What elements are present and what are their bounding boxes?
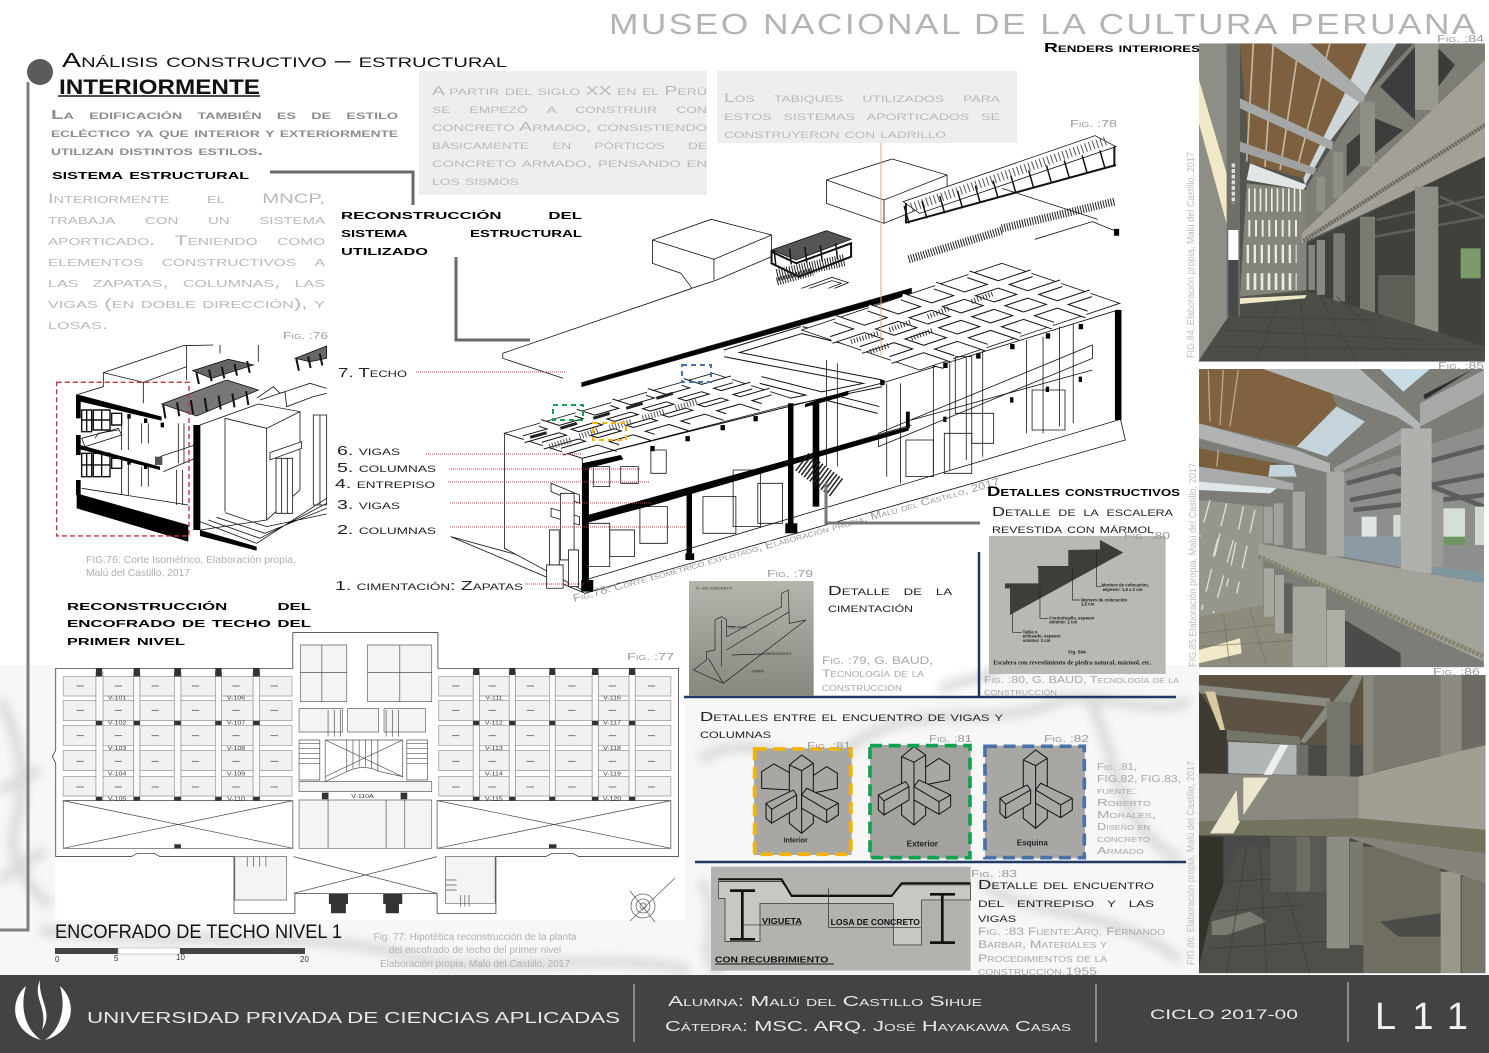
construction layer labels: 2. columnas bbox=[337, 522, 436, 537]
scale bar: 5 bbox=[114, 954, 119, 963]
heading reconstruccion sistema bbox=[341, 206, 582, 258]
section face bbox=[582, 310, 1118, 580]
beam labels: V-110A bbox=[351, 794, 375, 800]
beam labels: V-111 bbox=[485, 695, 503, 701]
right wing panels bbox=[439, 677, 671, 796]
subheading interiormente: INTERIORMENTE bbox=[59, 76, 260, 99]
beam interiors bbox=[96, 673, 635, 800]
callout: concreto armado bbox=[419, 71, 707, 195]
stair annotations: 1,5 cm bbox=[1081, 601, 1095, 606]
steps bbox=[200, 498, 327, 543]
interior columns and floors bbox=[582, 323, 1092, 483]
beam labels: V-118 bbox=[603, 746, 621, 752]
callout: tabiques: Los tabiques utilizados para bbox=[724, 91, 1000, 105]
caption fig 76: Malú del Castillo, 2017 bbox=[86, 568, 190, 579]
callout: concreto armado: concreto armado, pensando en bbox=[432, 156, 707, 170]
caption fig 79: Fig. :79, G. BAUD, bbox=[822, 655, 933, 667]
scale bar: 10 bbox=[176, 953, 185, 962]
construction layer labels: 3. vigas bbox=[337, 497, 400, 512]
caption joints source: concreto bbox=[1097, 834, 1151, 845]
stair annotations: Escalera con revestimiento de piedra natural, mármol, etc. bbox=[993, 659, 1152, 666]
callout: concreto armado: los sismos bbox=[432, 174, 519, 188]
north symbol bbox=[630, 878, 675, 922]
exploded box left bbox=[653, 219, 772, 288]
scale bar: 20 bbox=[300, 955, 309, 964]
marble texture background bbox=[0, 665, 1200, 975]
red dashed zone bbox=[57, 382, 189, 536]
callout: concreto armado: A partir del siglo XX en el Perú bbox=[432, 84, 707, 98]
photo fig 83 entrepiso detail: CON RECUBRIMIENTO bbox=[715, 955, 828, 964]
caption joints source: Roberto bbox=[1097, 798, 1152, 809]
caption joints source: fuente: bbox=[1097, 786, 1136, 797]
university name: UNIVERSIDAD PRIVADA DE CIENCIAS APLICADAS bbox=[87, 1010, 620, 1027]
photo fig 83 entrepiso detail: VIGUETA bbox=[762, 916, 803, 926]
photo fig 79 foundation detail: ZAPATA bbox=[752, 670, 765, 674]
construction layer labels: 7. Techo bbox=[338, 365, 407, 380]
beam labels: V-105 bbox=[108, 796, 127, 802]
callout: tabiques bbox=[717, 71, 1017, 143]
heading detalle escalera: revestida con mármol bbox=[992, 521, 1154, 536]
intro paragraph: utilizan distintos estilos. bbox=[51, 143, 263, 158]
heading detalle entrepiso bbox=[978, 877, 1154, 925]
central roof beams bbox=[725, 330, 944, 410]
heading detalle escalera: Detalle de la escalera bbox=[992, 504, 1173, 519]
beam labels: V-110 bbox=[227, 796, 245, 802]
beam labels: V-116 bbox=[603, 695, 621, 701]
callout: concreto armado: se empezó a construir con bbox=[432, 102, 707, 116]
highlight box: interior bbox=[593, 423, 626, 440]
beam labels: V-104 bbox=[108, 771, 127, 777]
slab techo bbox=[503, 288, 911, 387]
main block bbox=[200, 404, 302, 530]
render fig 86 bbox=[1199, 675, 1486, 973]
central block bbox=[235, 645, 495, 903]
slats bbox=[909, 188, 1119, 259]
photo joint interior: Interior bbox=[784, 838, 808, 845]
second floor band bbox=[879, 345, 1092, 447]
heading reconstruccion sistema: utilizado bbox=[341, 242, 428, 258]
beam labels: V-115 bbox=[485, 796, 503, 802]
small canopy bbox=[772, 231, 851, 302]
construction layer labels: 5. columnas bbox=[337, 460, 436, 475]
heading detalle entrepiso: del entrepiso y las bbox=[978, 895, 1154, 910]
beam labels: V-101 bbox=[108, 695, 127, 701]
heading reconstruccion encofrado: encofrado de techo del bbox=[67, 614, 311, 630]
caption fig 77: Fig. 77: Hipotética reconstrucción de la planta bbox=[374, 932, 577, 943]
canopies bbox=[162, 346, 327, 416]
caption joints source: Diseño en bbox=[1097, 822, 1150, 833]
figure label 82: Fig. :82 bbox=[1044, 734, 1090, 745]
highlight box: esquina bbox=[682, 365, 711, 382]
open void crosses bbox=[63, 801, 671, 893]
title: MUSEO NACIONAL DE LA CULTURA PERUANA bbox=[609, 9, 1478, 41]
stair annotations: mínimo: 3 cm bbox=[1023, 638, 1051, 643]
beam labels: V-119 bbox=[603, 771, 621, 777]
sheet number: L11 bbox=[1375, 996, 1468, 1038]
vertical caption fig 86: FIG.86: Elaboración propia, Malú del Castillo, 2017 bbox=[1186, 761, 1197, 965]
stair annotations: espesor: 1,5 a 2 cm bbox=[1103, 587, 1143, 592]
figure label 77: Fig. :77 bbox=[627, 652, 675, 663]
construction layer labels: 1. cimentación: Zapatas bbox=[335, 578, 523, 593]
ground plinth bbox=[451, 417, 1125, 593]
paragraph sistema aporticado: losas. bbox=[48, 316, 108, 332]
column squares bbox=[96, 668, 635, 913]
photo fig 79 foundation detail: SOBRECIMIENTO bbox=[763, 652, 792, 656]
plan title: ENCOFRADO DE TECHO NIVEL 1 bbox=[55, 922, 342, 943]
callout: concreto armado: básicamente en pórticos de bbox=[432, 138, 707, 152]
photo fig 80 stair detail bbox=[989, 536, 1166, 674]
floor plan encofrado bbox=[52, 633, 678, 913]
floors and columns bbox=[82, 417, 195, 505]
roof grid right wing bbox=[802, 263, 1120, 370]
caption fig 83: Procedimientos de la bbox=[978, 953, 1108, 965]
stair annotations: enlosado, espesor bbox=[1023, 634, 1061, 639]
connector detalles bbox=[826, 483, 980, 523]
beam labels: V-114 bbox=[485, 771, 503, 777]
photo fig 83 entrepiso detail bbox=[711, 867, 971, 971]
photo fig 79 foundation detail: ®—DE CONCRETO bbox=[696, 586, 732, 591]
figure label 76: Fig. :76 bbox=[283, 331, 329, 342]
photo fig 83 entrepiso detail: LOSA DE CONCRETO bbox=[831, 917, 920, 927]
beam labels: V-106 bbox=[227, 695, 246, 701]
window grids bbox=[82, 410, 122, 477]
beam labels: V-112 bbox=[485, 720, 503, 726]
render fig 85 bbox=[1199, 369, 1484, 668]
roof grid left wing bbox=[504, 373, 802, 458]
caption fig 79 bbox=[822, 655, 933, 694]
heading reconstruccion encofrado: primer nivel bbox=[67, 632, 185, 648]
intro paragraph: ecléctico ya que interior y exteriormente bbox=[51, 125, 398, 140]
callout: tabiques: construyeron con ladrillo bbox=[724, 127, 946, 141]
paragraph sistema aporticado: Interiormente el MNCP, bbox=[48, 190, 325, 206]
paragraph sistema aporticado bbox=[48, 190, 326, 332]
beam labels: V-102 bbox=[108, 720, 127, 726]
photo fig 79 foundation detail bbox=[689, 581, 814, 696]
highlight box: exterior bbox=[553, 405, 583, 420]
beam labels: V-103 bbox=[108, 746, 127, 752]
student: Alumna: Malú del Castillo Sihue bbox=[668, 994, 983, 1010]
paragraph sistema aporticado: elementos constructivos a bbox=[48, 253, 326, 269]
exploded isometric drawing bbox=[451, 136, 1125, 593]
stair annotations: Tabla o bbox=[1023, 630, 1038, 635]
upper volume bbox=[76, 345, 258, 403]
beam labels: V-109 bbox=[227, 771, 246, 777]
heading reconstruccion sistema: reconstrucción del bbox=[341, 206, 582, 222]
figure label 84: Fig. :84 bbox=[1437, 34, 1485, 45]
facade wall bbox=[504, 433, 582, 590]
figure label 79: Fig. :79 bbox=[767, 569, 814, 580]
heading detalle cimentacion bbox=[828, 583, 952, 615]
logo bbox=[15, 980, 71, 1040]
figure label 81 exterior: Fig. :81 bbox=[929, 734, 973, 745]
connector reconstruccion bbox=[456, 257, 530, 340]
long canopy bbox=[903, 136, 1116, 223]
beam labels: V-120 bbox=[603, 796, 622, 802]
blue divider lower bbox=[695, 861, 1186, 863]
slab tags bbox=[76, 686, 655, 787]
caption fig 80: Fig. :80, G. BAUD, Tecnología de la bbox=[984, 675, 1179, 686]
paragraph sistema aporticado: aporticado. Teniendo como bbox=[48, 232, 325, 248]
photo joint exterior bbox=[870, 745, 971, 858]
beam labels: V-107 bbox=[227, 720, 246, 726]
figure label 81 interior: Fig. :81 bbox=[807, 741, 852, 752]
heading reconstruccion encofrado: reconstrucción del bbox=[67, 597, 311, 613]
divider one bbox=[633, 984, 635, 1042]
heading detalles constructivos: Detalles constructivos bbox=[987, 483, 1180, 499]
construction layer labels bbox=[335, 365, 523, 593]
callout: concreto armado: concreto Armado, consistiendo bbox=[432, 120, 707, 134]
render fig 84 bbox=[1199, 43, 1485, 362]
blue divider middle bbox=[684, 696, 1176, 698]
interior cabinets bbox=[588, 357, 1065, 567]
scale bar bbox=[55, 948, 309, 964]
stair annotations: Fig. 594. bbox=[1068, 649, 1087, 654]
figure label 85: Fig. :85 bbox=[1438, 361, 1485, 372]
orange tabique leader bbox=[880, 143, 882, 355]
divider two bbox=[1095, 984, 1097, 1042]
caption joints source: Armado bbox=[1097, 846, 1145, 857]
paragraph sistema aporticado: vigas (en doble dirección), y bbox=[48, 295, 326, 311]
stair annotations bbox=[993, 550, 1152, 666]
black section cuts bbox=[581, 310, 1121, 592]
wing outlines bbox=[52, 633, 678, 913]
beam labels: V-117 bbox=[603, 720, 621, 726]
caption fig 77 bbox=[374, 932, 577, 970]
heading detalle entrepiso: Detalle del encuentro bbox=[978, 877, 1154, 892]
caption fig 83: Barbar, Materiales y bbox=[978, 939, 1108, 951]
divider three bbox=[1347, 982, 1349, 1042]
left wing panels bbox=[63, 677, 292, 796]
staircase bbox=[802, 462, 837, 488]
scale bar: 0 bbox=[55, 955, 60, 964]
heading detalles encuentro bbox=[700, 709, 1003, 741]
exploded box right bbox=[826, 159, 947, 223]
caption fig 83: Fig. :83 Fuente:Arq. Fernando bbox=[978, 926, 1165, 938]
figure label 83: Fig. :83 bbox=[971, 869, 1018, 880]
cycle: CICLO 2017-00 bbox=[1150, 1006, 1298, 1022]
connector sistema estructural bbox=[270, 172, 413, 205]
beam labels: V-113 bbox=[485, 746, 503, 752]
construction layer labels: 4. entrepiso bbox=[335, 476, 435, 491]
heading detalles encuentro: columnas bbox=[700, 726, 771, 741]
chair: Cátedra: MSC. ARQ. José Hayakawa Casas bbox=[665, 1019, 1071, 1035]
timeline bullet and rail bbox=[0, 59, 53, 930]
stair annotations: Mortero de colocación bbox=[1081, 597, 1127, 602]
construction layer labels: 6. vigas bbox=[337, 443, 400, 458]
entrance facade bbox=[547, 483, 580, 588]
caption fig 83: construcción,1955 bbox=[978, 966, 1097, 978]
rear building bbox=[257, 383, 327, 505]
heading sistema estructural: sistema estructural bbox=[52, 166, 249, 182]
figure 76 isometric cut bbox=[57, 345, 327, 551]
vertical caption fig 85: FIG.85:Elaboración propia, Malú del Castillo, 2017 bbox=[1188, 463, 1199, 667]
photo joint exterior: Exterior bbox=[907, 839, 939, 849]
beam labels bbox=[108, 695, 622, 802]
vertical beams bbox=[96, 672, 635, 801]
stair annotations: Contrahuella, espesor bbox=[1049, 616, 1095, 621]
caption fig 76: FIG.76: Corte Isométrico, Elaboración propia, bbox=[86, 555, 296, 566]
black cuts bbox=[76, 395, 257, 551]
photo joint esquina bbox=[985, 746, 1085, 858]
stair section bbox=[1005, 540, 1123, 615]
stair annotations: mínimo: 2 cm bbox=[1049, 620, 1077, 625]
heading detalle escalera bbox=[992, 504, 1173, 536]
blue divider vertical bbox=[978, 552, 980, 697]
heading render group: Renders interiores bbox=[1044, 40, 1200, 55]
figure label 78: Fig. :78 bbox=[1070, 119, 1118, 130]
leader lines bbox=[416, 372, 687, 584]
caption joints source: FIG.82, FIG.83, bbox=[1097, 774, 1181, 785]
caption joints source bbox=[1097, 762, 1181, 857]
stair annotations: Mortero de colocación, bbox=[1102, 583, 1149, 588]
heading detalle cimentacion: Detalle de la bbox=[828, 583, 952, 598]
heading detalles encuentro: Detalles entre el encuentro de vigas y bbox=[700, 709, 1003, 724]
rotated caption fig 78: Fig.78: Corte Isométrico explotado, Elaboración propia, Malú del Castillo, 2017 bbox=[572, 476, 1001, 605]
beam labels: V-108 bbox=[227, 746, 246, 752]
paragraph sistema aporticado: trabaja con un sistema bbox=[48, 211, 325, 227]
heading detalle cimentacion: cimentación bbox=[828, 600, 913, 615]
heading detalle entrepiso: vigas bbox=[978, 910, 1016, 925]
caption fig 79: construcción bbox=[822, 682, 902, 694]
photo joint esquina: Esquina bbox=[1017, 838, 1048, 847]
photo fig 79 foundation detail: COLUMNAS bbox=[728, 625, 748, 629]
intro paragraph: La edificación también es de estilo bbox=[51, 107, 398, 122]
figure label 86: Fig. :86 bbox=[1433, 667, 1481, 678]
caption joints source: Fig. :81, bbox=[1097, 762, 1137, 773]
figure label 80: Fig. :80 bbox=[1124, 531, 1171, 542]
section heading: Análisis constructivo – estructural bbox=[62, 50, 507, 72]
vertical caption fig 84: FIG.84: Elaboración propia, Malú del Castillo, 2017 bbox=[1186, 152, 1197, 358]
callout: tabiques: estos sistemas aporticados se bbox=[724, 109, 1000, 123]
footer bbox=[0, 975, 1489, 1053]
intro paragraph bbox=[51, 107, 398, 158]
paragraph sistema aporticado: las zapatas, columnas, las bbox=[48, 274, 326, 290]
heading reconstruccion sistema: sistema estructural bbox=[341, 224, 582, 240]
caption fig 77: Elaboración propia, Malú del Castillo, 2017 bbox=[380, 959, 570, 970]
heading reconstruccion encofrado bbox=[67, 597, 311, 648]
caption fig 76 bbox=[86, 555, 296, 579]
caption fig 79: Tecnología de la bbox=[822, 668, 925, 680]
caption fig 83 bbox=[978, 926, 1165, 978]
caption fig 80: construcción bbox=[984, 687, 1057, 698]
photo joint interior bbox=[754, 748, 852, 855]
caption fig 80 bbox=[984, 675, 1179, 698]
caption fig 77: del encofrado de techo del primer nivel bbox=[389, 945, 561, 956]
caption joints source: Morales, bbox=[1097, 810, 1156, 821]
